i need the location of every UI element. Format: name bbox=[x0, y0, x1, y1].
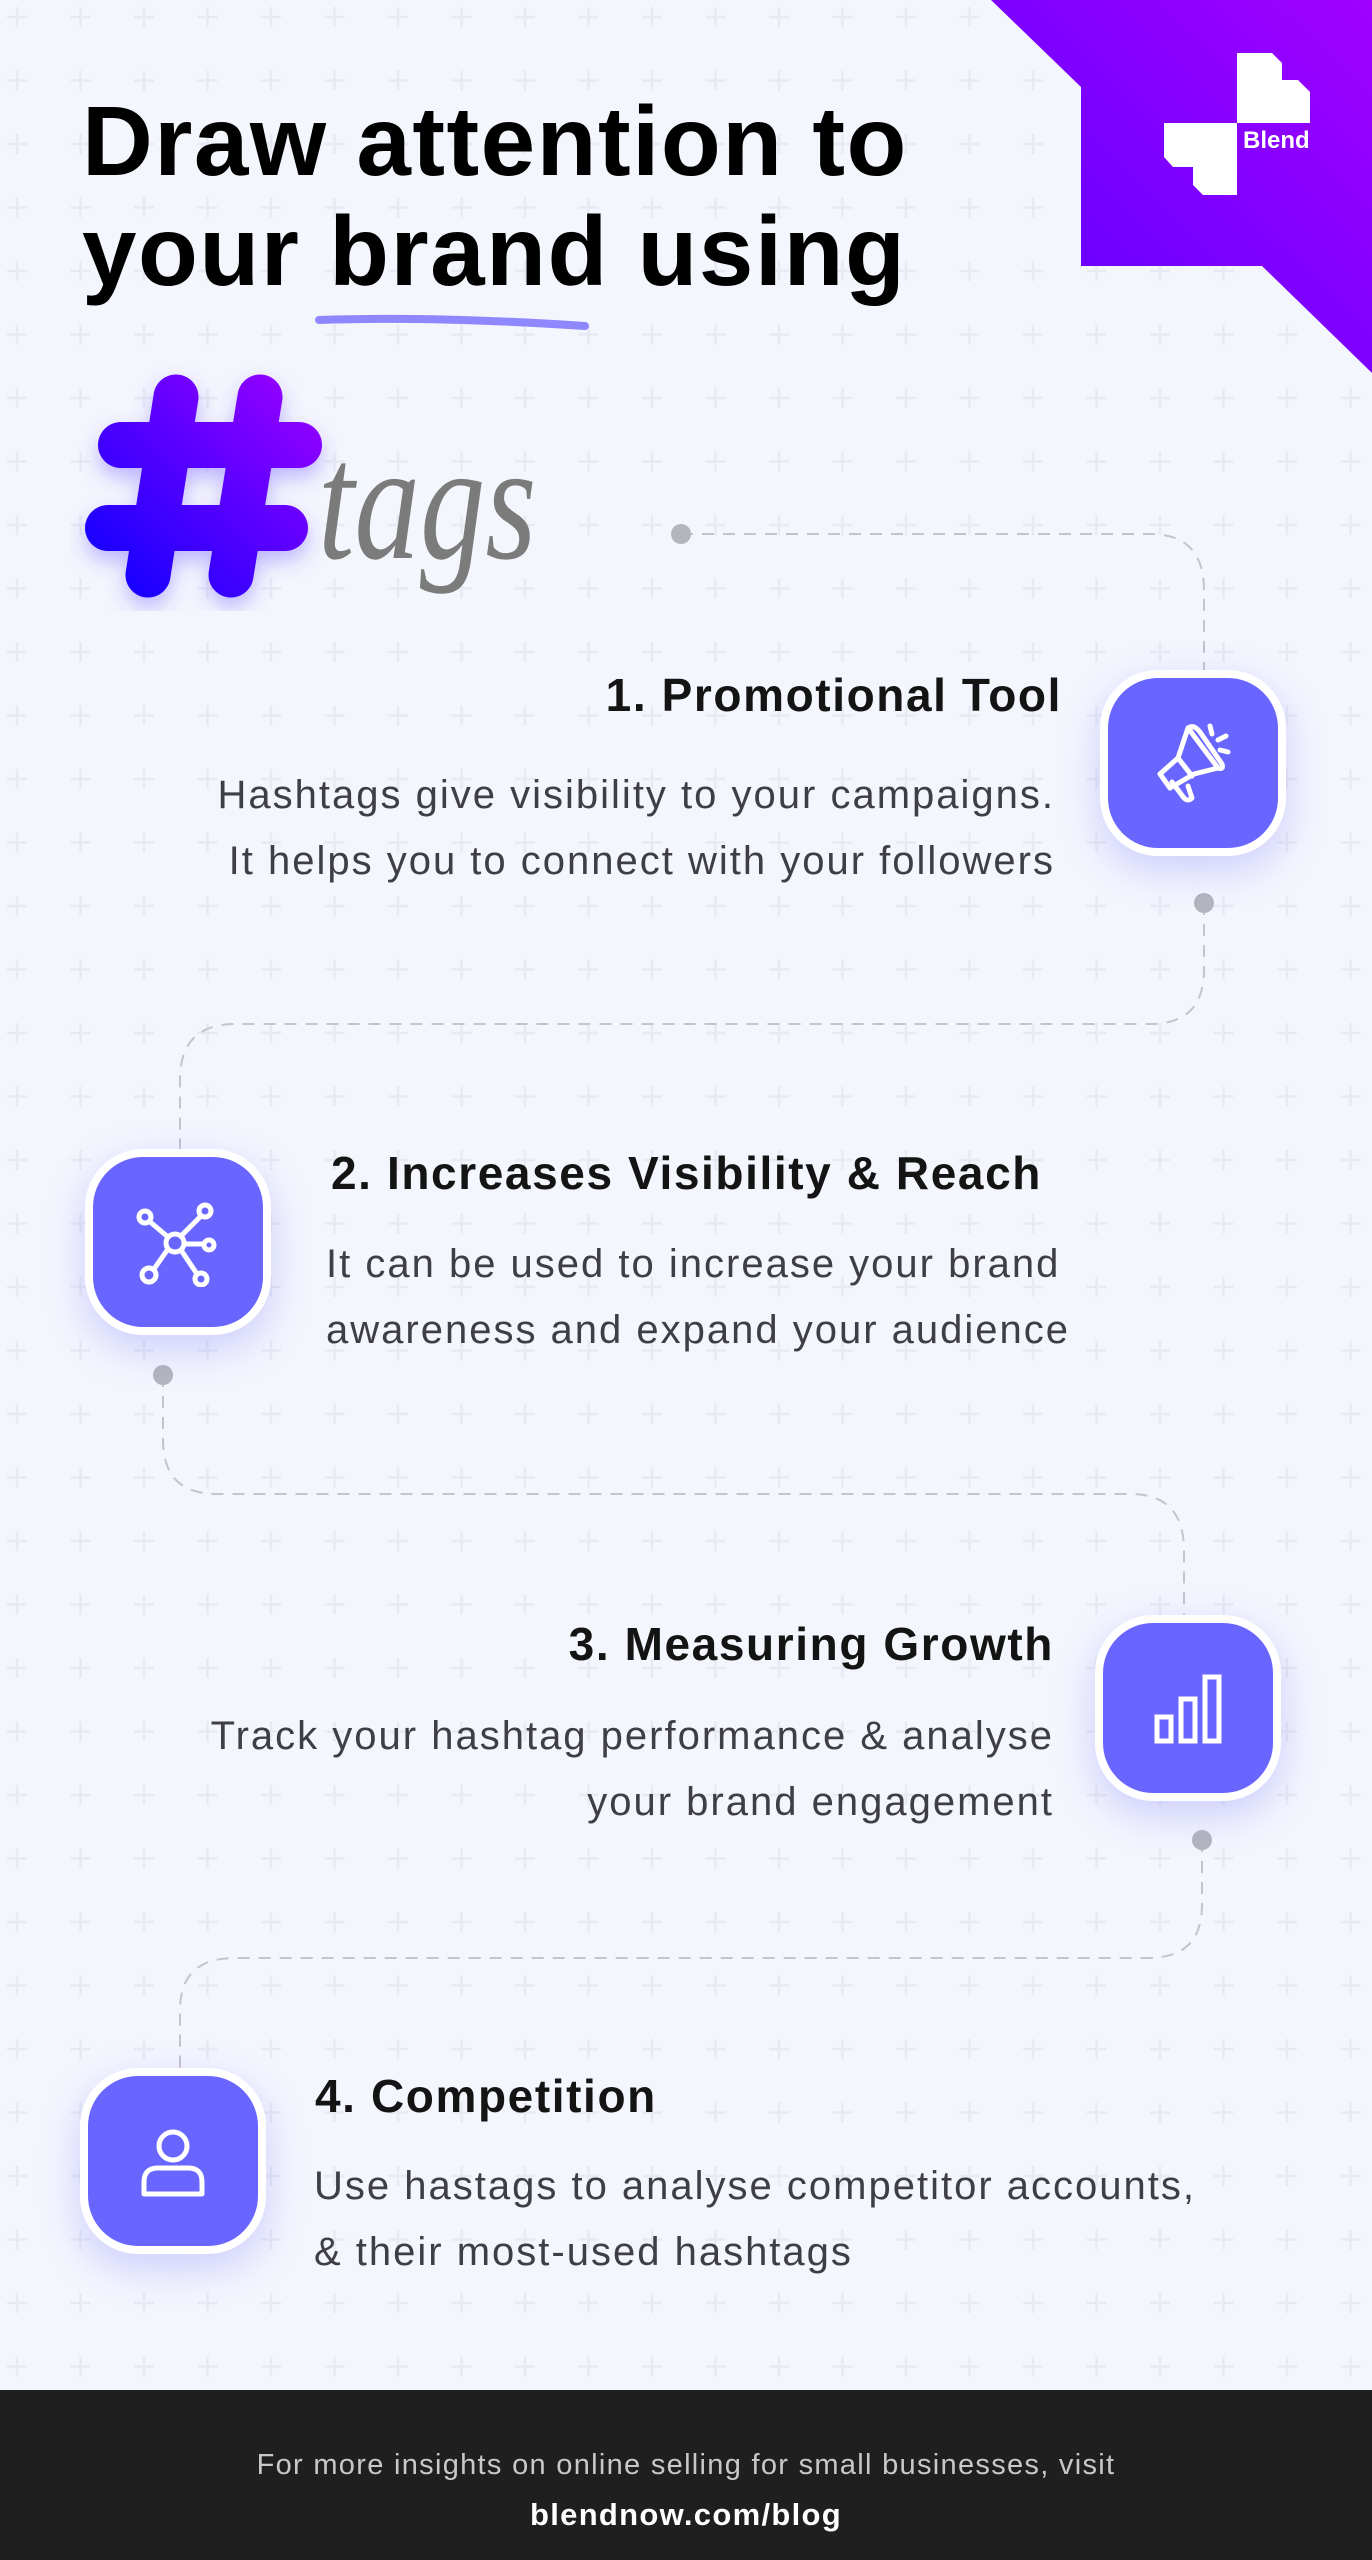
icon: bar chart bbox=[1095, 1615, 1281, 1801]
title bbox=[82, 86, 908, 306]
text 2 bbox=[326, 1242, 1070, 1352]
underline stroke bbox=[315, 314, 589, 330]
text 4: Use hastags to analyse competitor accounts, bbox=[314, 2164, 1196, 2208]
text 1: It helps you to connect with your followers bbox=[229, 839, 1055, 883]
icon: blend logo: Blend bbox=[1243, 127, 1310, 154]
footer text: For more insights on online selling for small businesses, visit bbox=[257, 2449, 1115, 2481]
script text: tags: tags bbox=[318, 409, 536, 595]
corner shape with logo bbox=[991, 0, 1372, 373]
text 1 bbox=[218, 773, 1055, 883]
heading 4: 4. Competition bbox=[315, 2070, 657, 2122]
text 3 bbox=[211, 1714, 1054, 1824]
footer text: blendnow.com/blog bbox=[530, 2497, 842, 2532]
title: Draw attention to bbox=[82, 86, 908, 196]
icon: user bbox=[80, 2068, 266, 2254]
footer bbox=[0, 2390, 1372, 2560]
text 1: Hashtags give visibility to your campaigns. bbox=[218, 773, 1055, 817]
text 2: awareness and expand your audience bbox=[326, 1308, 1070, 1352]
heading 1: 1. Promotional Tool bbox=[606, 669, 1062, 721]
icon: network bbox=[85, 1149, 271, 1335]
title: your brand using bbox=[82, 196, 906, 306]
icon: megaphone bbox=[1100, 670, 1286, 856]
hashtag graphic bbox=[74, 374, 333, 611]
text 3: Track your hashtag performance & analyse bbox=[211, 1714, 1054, 1758]
icon: blend logo bbox=[1164, 53, 1310, 195]
text 4: & their most-used hashtags bbox=[314, 2230, 853, 2274]
text 2: It can be used to increase your brand bbox=[326, 1242, 1060, 1286]
heading 3: 3. Measuring Growth bbox=[569, 1618, 1054, 1670]
footer text bbox=[257, 2449, 1115, 2532]
text 3: your brand engagement bbox=[587, 1780, 1054, 1824]
text 4 bbox=[314, 2164, 1196, 2274]
heading 2: 2. Increases Visibility & Reach bbox=[331, 1147, 1042, 1199]
